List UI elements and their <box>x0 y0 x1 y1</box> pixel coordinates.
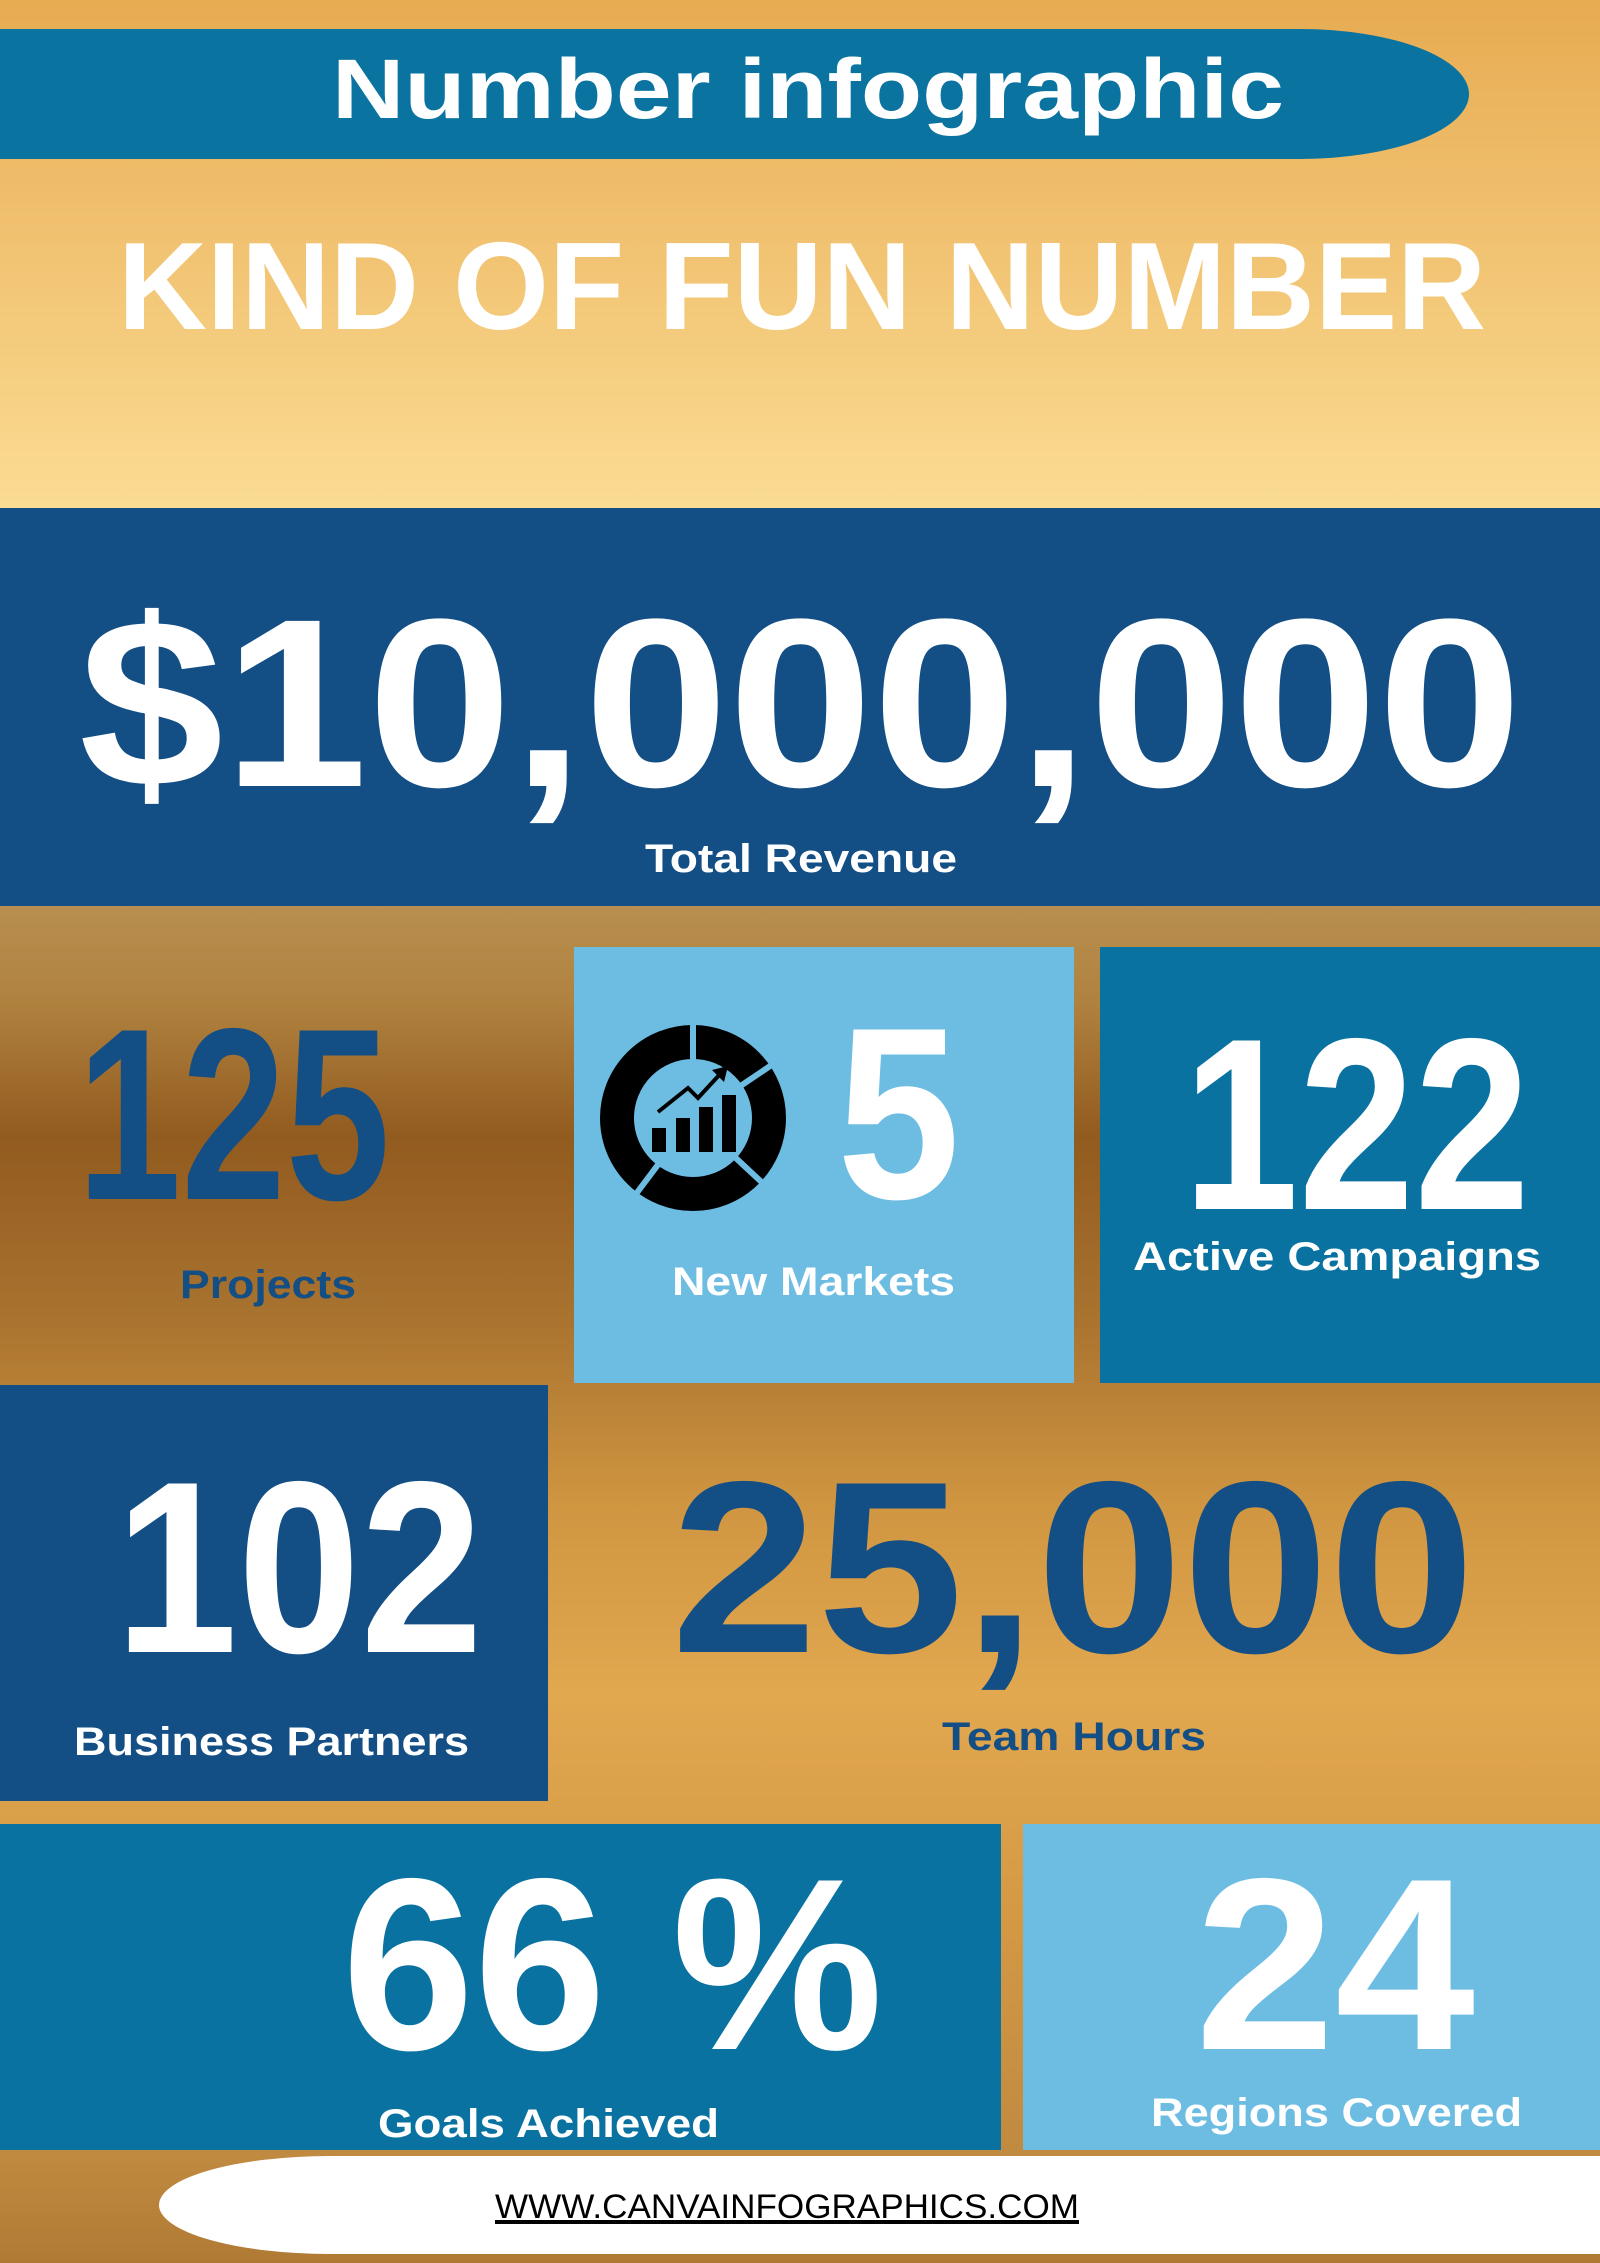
panel: projects <box>77 977 390 1307</box>
panel: regions covered: Regions Covered <box>1151 2091 1522 2135</box>
panel: new markets: 5 <box>837 976 960 1250</box>
panel: active campaigns <box>1100 947 1600 1383</box>
panel: business partners <box>0 1385 548 1801</box>
panel: projects: 125 <box>77 977 390 1251</box>
subtitle: KIND OF FUN NUMBER <box>118 218 1486 356</box>
label revenue: Total Revenue <box>645 837 957 881</box>
panel: team hours: 25,000 <box>671 1430 1475 1704</box>
big number revenue: $10,000,000 <box>79 569 1522 837</box>
panel: new markets: New Markets <box>672 1260 955 1304</box>
icon: donut chart with growth bars <box>617 1010 782 1198</box>
panel: goals achieved: Goals Achieved <box>378 2102 719 2146</box>
panel: goals achieved <box>0 1824 1001 2150</box>
panel: business partners: Business Partners <box>74 1720 469 1764</box>
panel: regions covered: 24 <box>1195 1827 1475 2101</box>
title: Number infographic <box>332 42 1284 136</box>
panel: new markets <box>574 947 1074 1383</box>
panel: projects: Projects <box>180 1263 356 1307</box>
panel: active campaigns: Active Campaigns <box>1133 1235 1541 1279</box>
panel: goals achieved: 66 % <box>342 1827 883 2101</box>
panel: business partners: 102 <box>115 1430 483 1704</box>
panel: team hours: Team Hours <box>942 1715 1206 1759</box>
footer <box>159 2156 1600 2254</box>
panel: regions covered <box>1023 1824 1600 2150</box>
title banner <box>0 29 1469 159</box>
panel: total revenue <box>0 508 1600 906</box>
panel: active campaigns: 122 <box>1183 987 1530 1261</box>
footer: WWW.CANVAINFOGRAPHICS.COM <box>495 2188 1079 2226</box>
